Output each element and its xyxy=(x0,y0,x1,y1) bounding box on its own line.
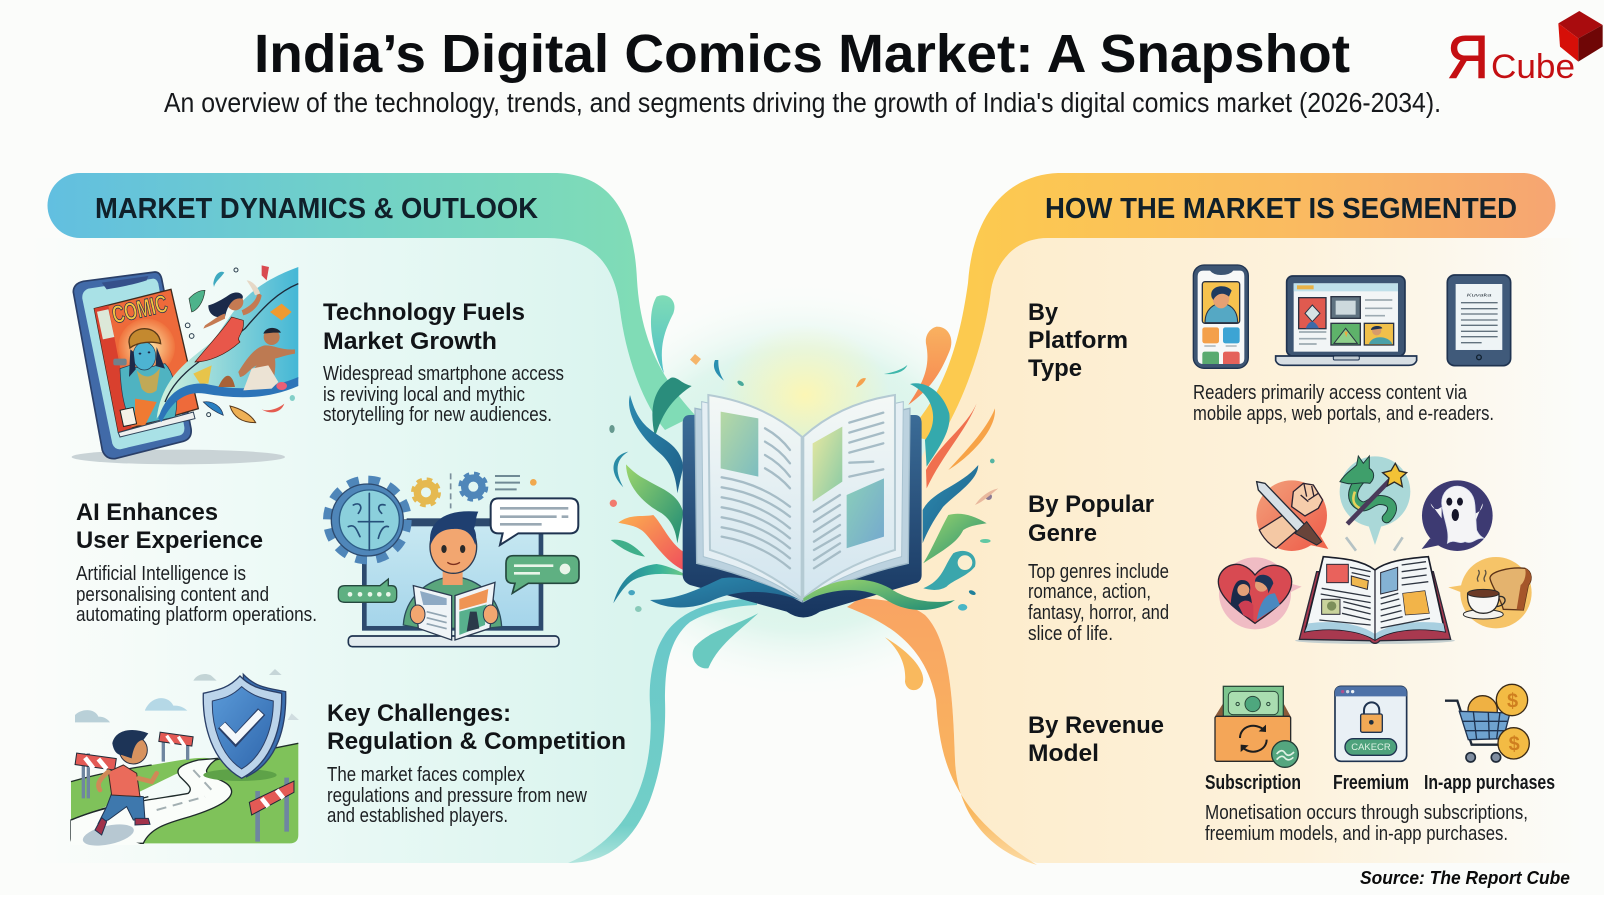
revenue labels: Subscription xyxy=(1205,772,1301,794)
man xyxy=(238,345,295,390)
heading: AI: AI Enhances xyxy=(76,499,218,526)
heading: revenue xyxy=(1028,712,1164,767)
title: India’s Digital Comics Market: A Snapshot xyxy=(254,24,1350,84)
barriers xyxy=(75,732,294,842)
left page xyxy=(708,395,802,598)
logo: RCube: Я xyxy=(1447,24,1489,91)
text: revenue xyxy=(1205,802,1528,845)
heading: genre: By Popular xyxy=(1028,491,1154,518)
heading: revenue: By Revenue xyxy=(1028,712,1164,739)
person xyxy=(403,577,502,628)
heading: platform: Type xyxy=(1028,355,1082,382)
heading: genre: Genre xyxy=(1028,520,1097,547)
block: by revenue model xyxy=(1028,684,1555,845)
text: technology: storytelling for new audiences. xyxy=(323,404,552,426)
romance bubble xyxy=(1218,557,1302,629)
icon: cart and coins: $ xyxy=(1509,734,1520,756)
text: technology: Widespread smartphone access xyxy=(323,363,564,385)
icons: phone, laptop, e-reader xyxy=(1193,265,1511,368)
heading: AI xyxy=(76,499,263,554)
block: by platform type xyxy=(1028,265,1511,425)
text: AI: automating platform operations. xyxy=(76,604,317,626)
center glow xyxy=(550,275,1050,705)
illustration: runner and shield xyxy=(71,669,299,850)
text: platform xyxy=(1193,382,1494,425)
fantasy bubble xyxy=(1340,456,1410,545)
text: technology: is reviving local and mythic xyxy=(323,384,525,406)
heading: technology: Technology Fuels xyxy=(323,299,525,326)
panel heading: market dynamics: MARKET DYNAMICS & OUTLOOK xyxy=(95,193,538,225)
right page xyxy=(803,395,895,598)
logo: RCube: Cube xyxy=(1491,48,1575,86)
wave xyxy=(157,267,298,419)
text: revenue: freemium models, and in-app purchases. xyxy=(1205,823,1508,845)
revenue labels: In-app purchases xyxy=(1424,772,1555,794)
book cover xyxy=(683,415,922,617)
icons: genre cluster xyxy=(1218,456,1532,644)
illustration: phone with comic: COMIC xyxy=(110,291,170,330)
text: genre: Top genres include xyxy=(1028,561,1169,583)
heading: platform xyxy=(1028,299,1128,382)
text: genre xyxy=(1028,561,1169,645)
leaves: left xyxy=(611,378,692,603)
page stacks xyxy=(695,408,802,602)
text: AI: personalising content and xyxy=(76,584,269,606)
icon: cart and coins xyxy=(1445,684,1529,762)
text: genre: slice of life. xyxy=(1028,623,1113,645)
block: key challenges xyxy=(71,669,626,850)
text: AI xyxy=(76,563,317,626)
header band: market dynamics xyxy=(48,173,695,430)
block: by popular genre xyxy=(1028,456,1532,645)
panel: how the market is segmented xyxy=(847,173,1585,865)
heading: platform: Platform xyxy=(1028,327,1128,354)
horror bubble xyxy=(1422,480,1493,551)
icon: subscription box xyxy=(1215,686,1298,767)
heading: technology xyxy=(323,299,525,355)
heading: technology: Market Growth xyxy=(323,328,497,355)
text: technology xyxy=(323,363,564,426)
chat bubbles xyxy=(491,498,578,545)
icon: cart and coins: $ xyxy=(1507,690,1518,712)
runner xyxy=(81,820,136,850)
icons: subscription, freemium, in-app purchases xyxy=(1215,684,1529,767)
source note: Source: The Report Cube xyxy=(1360,867,1570,888)
central illustration: open book with splashes xyxy=(609,295,998,690)
header band: segmented xyxy=(905,173,1556,442)
subtitle: An overview of the technology, trends, and segments driving the growth of India's digital comics market (2026-2034). xyxy=(164,87,1441,118)
revenue labels: Freemium xyxy=(1333,772,1409,794)
text: key challenges: and established players. xyxy=(327,805,508,827)
logo: RCube xyxy=(1447,11,1603,91)
icon: freemium window xyxy=(1335,686,1407,761)
leaves: right xyxy=(910,383,995,590)
text: genre: romance, action, xyxy=(1028,581,1151,603)
text: key challenges: The market faces complex xyxy=(327,764,525,786)
text: AI: Artificial Intelligence is xyxy=(76,563,246,585)
heading: key challenges: Key Challenges: xyxy=(327,700,511,727)
text: key challenges xyxy=(327,764,587,827)
center open book xyxy=(1295,557,1455,644)
woman xyxy=(195,317,244,362)
text: platform: Readers primarily access content via xyxy=(1193,382,1468,404)
block: technology fuels market growth xyxy=(72,265,564,464)
panel heading: segmented: HOW THE MARKET IS SEGMENTED xyxy=(1045,193,1517,225)
text: platform: mobile apps, web portals, and e-readers. xyxy=(1193,403,1494,425)
lower band: left xyxy=(568,598,757,863)
block: AI enhances user experience xyxy=(76,473,579,647)
heading: platform: By xyxy=(1028,299,1059,326)
action bubble xyxy=(1256,480,1328,551)
slice of life bubble xyxy=(1448,557,1532,628)
heading: key challenges xyxy=(327,700,626,755)
open magazine xyxy=(413,586,452,640)
splashes xyxy=(213,272,224,287)
panel: market dynamics and outlook xyxy=(30,173,760,863)
icons: phone, laptop, e-reader: Kuvaka xyxy=(1467,292,1492,298)
illustration: phone with comic xyxy=(72,265,298,464)
text: genre: fantasy, horror, and xyxy=(1028,602,1169,624)
shield xyxy=(243,674,286,777)
text: revenue: Monetisation occurs through subscriptions, xyxy=(1205,802,1528,824)
bottom ribbons xyxy=(650,577,955,610)
illustration: AI reader xyxy=(328,473,579,647)
heading: revenue: Model xyxy=(1028,740,1099,767)
revenue labels xyxy=(1205,772,1555,794)
heading: key challenges: Regulation & Competition xyxy=(327,728,626,755)
text: key challenges: regulations and pressure from new xyxy=(327,785,587,807)
icon: freemium window: CAKECR xyxy=(1351,742,1391,752)
heading: AI: User Experience xyxy=(76,527,263,554)
heading: genre xyxy=(1028,491,1154,547)
lower band: right xyxy=(847,598,1037,865)
